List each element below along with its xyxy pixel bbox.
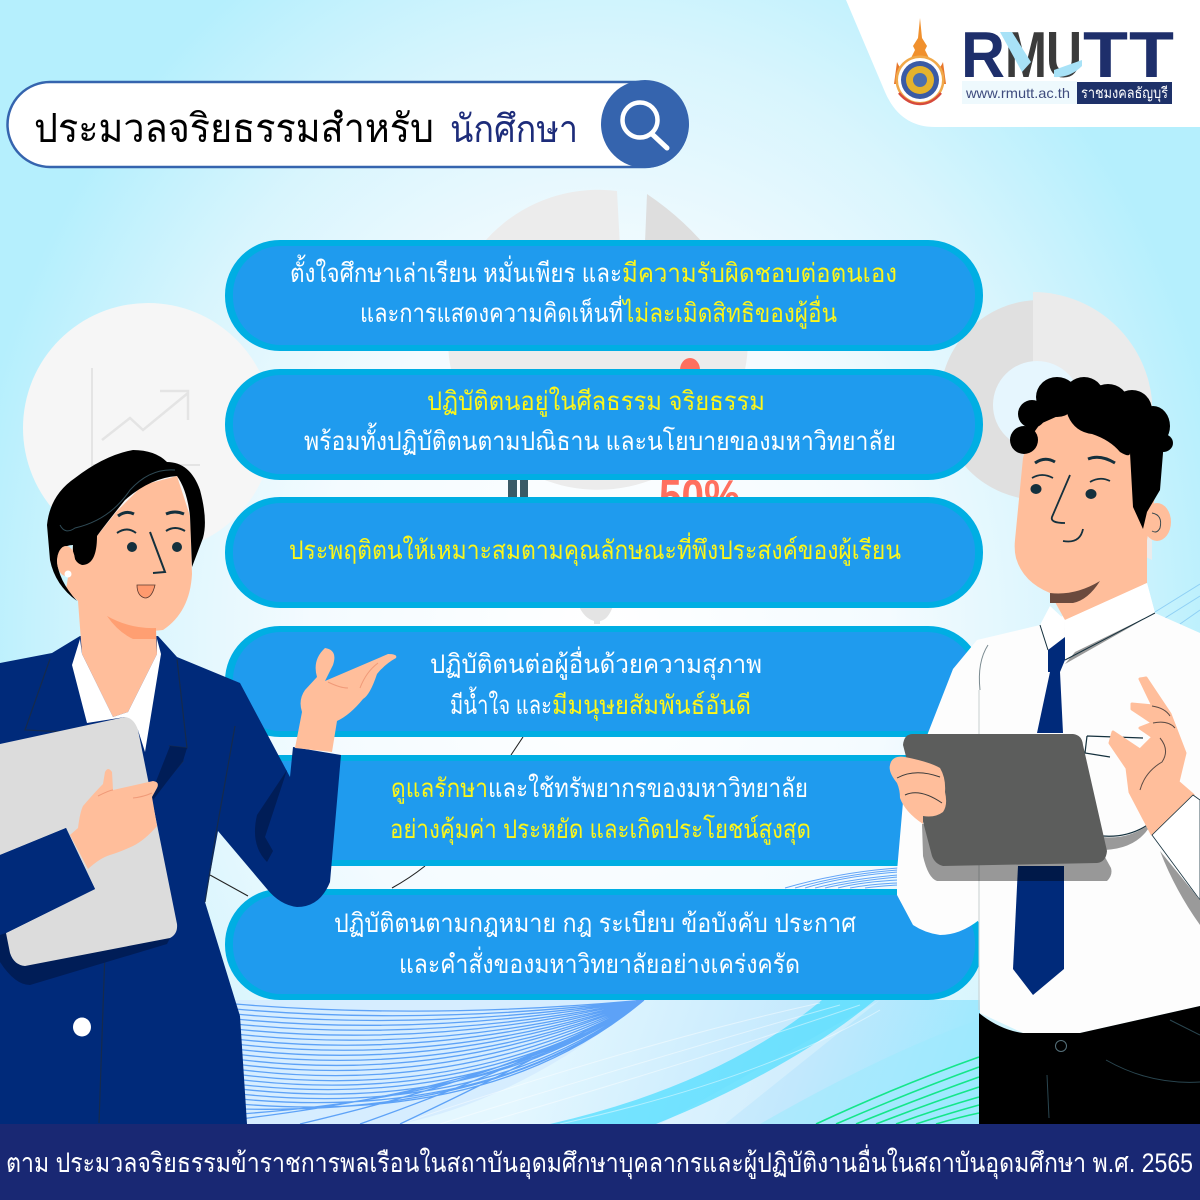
panel: row 4: ปฏิบัติตนต่อผู้อื่นด้วยความสุภาพ (430, 646, 762, 680)
hair (1010, 377, 1173, 529)
collar (1040, 583, 1155, 660)
title text: ประมวลจริยธรรมสำหรับ (34, 107, 434, 151)
logo url and name: ราชมงคลธัญบุรี (1081, 85, 1168, 103)
left hand (890, 757, 946, 824)
panel: row 5: อย่างคุ้มค่า ประหยัด และเกิดประโยชน์สูงสุด (390, 814, 811, 845)
illustration: woman (0, 450, 396, 1124)
shirt (897, 583, 1200, 1033)
background decoration: bars and 50 percent: 50% (659, 470, 740, 522)
eyes and brows (1030, 484, 1042, 494)
hand on tablet (70, 769, 158, 869)
background decoration: donut chart (940, 292, 1152, 560)
icon: university seal (894, 18, 946, 104)
background decoration: pie chart (448, 190, 748, 490)
ear and earring (57, 546, 75, 576)
icon: magnifier (601, 80, 689, 168)
illustration: man (890, 377, 1200, 1124)
tie lower (1013, 866, 1064, 995)
title search bar (8, 80, 689, 168)
panel: row 1 (225, 240, 983, 351)
background waves (235, 584, 1200, 1124)
panel: row 2 (225, 369, 983, 480)
hair (47, 450, 205, 601)
tie upper (1037, 637, 1065, 733)
logo wordmark (961, 18, 1174, 91)
logo wordmark: T (1129, 18, 1174, 91)
logo wordmark: U (1046, 18, 1082, 91)
panel: row 1: ตั้งใจศึกษาเล่าเรียน หมั่นเพียร และ (290, 254, 622, 288)
panel: row 6: ปฏิบัติตนตามกฎหมาย กฎ ระเบียบ ข้อบังคับ ประกาศ (334, 908, 856, 938)
collar (72, 639, 161, 752)
sleeve (0, 828, 95, 935)
panel: row 6 (225, 889, 983, 1000)
pocket and shirt folds (1085, 736, 1152, 836)
panel: row 5: และใช้ทรัพยากรของมหาวิทยาลัย (488, 773, 808, 803)
right hand (1110, 678, 1193, 834)
jacket (0, 636, 341, 1124)
tablet (922, 824, 1112, 881)
logo wordmark: M (1005, 18, 1047, 91)
panel: row 2: พร้อมทั้งปฏิบัติตนตามปณิธาน และนโยบายของมหาวิทยาลัย (304, 422, 896, 456)
title text: นักศึกษา (450, 109, 578, 151)
neck and face (1050, 532, 1147, 620)
panel: row 3: ประพฤติตนให้เหมาะสมตามคุณลักษณะที่พึงประสงค์ของผู้เรียน (289, 532, 901, 566)
background decoration: growth chart circle (23, 303, 273, 553)
panel: row 6: และคำสั่งของมหาวิทยาลัยอย่างเคร่งครัด (399, 946, 800, 979)
panel: row 1: ไม่ละเมิดสิทธิของผู้อื่น (621, 295, 837, 329)
logo url and name (962, 81, 1172, 104)
panel: row 4: มีมนุษยสัมพันธ์อันดี (552, 690, 751, 721)
neck and face (78, 601, 157, 717)
raised hand (295, 648, 396, 752)
trousers (979, 1006, 1200, 1124)
logo panel (846, 0, 1200, 127)
panel: row 1: และการแสดงความคิดเห็นที่ (360, 295, 623, 328)
ear (1143, 503, 1171, 541)
logo wordmark: T (1083, 18, 1128, 91)
panel: row 3 (225, 497, 983, 608)
footer bar (0, 1124, 1200, 1200)
cuff (1152, 795, 1200, 900)
panel: row 1: มีความรับผิดชอบต่อตนเอง (622, 258, 897, 288)
background decoration: bars and 50 percent (210, 470, 740, 896)
logo wordmark: R (961, 18, 1005, 91)
mouth (137, 585, 155, 598)
panel: row 5 (225, 755, 983, 866)
eyes and brows (127, 542, 137, 552)
panel: row 4: มีน้ำใจ และ (450, 686, 552, 720)
panel: row 4 (225, 626, 983, 737)
logo url and name: www.rmutt.ac.th (965, 85, 1070, 101)
button (73, 1018, 91, 1036)
panel: row 5: ดูแลรักษา (391, 773, 488, 804)
panel: row 2: ปฏิบัติตนอยู่ในศีลธรรม จริยธรรม (427, 386, 765, 417)
tablet (0, 933, 170, 985)
